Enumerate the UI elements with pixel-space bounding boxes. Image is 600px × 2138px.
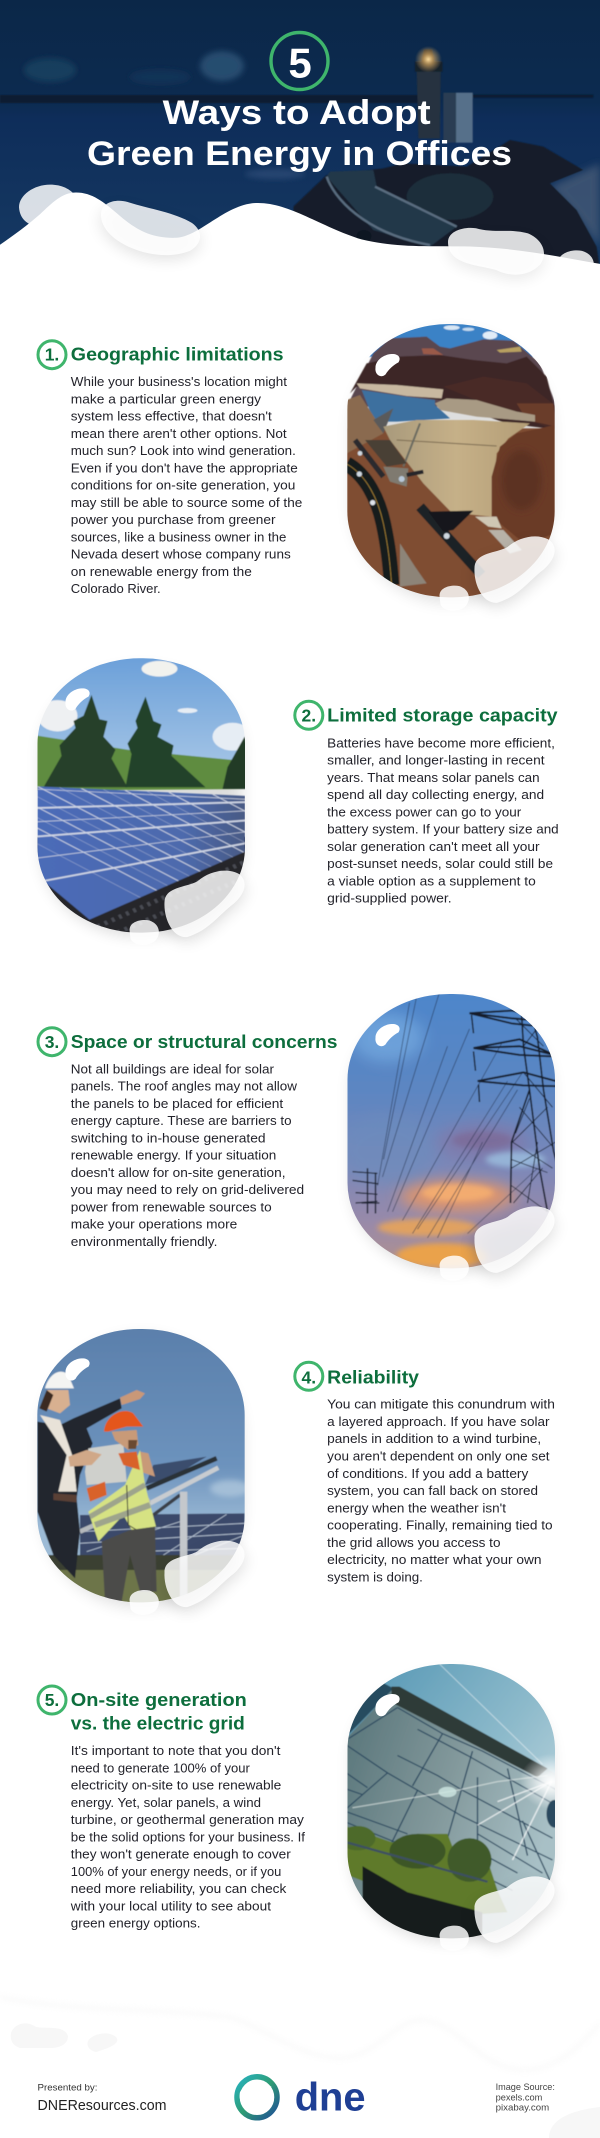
presented by	[38, 2083, 166, 2114]
panel: section 3 space or structural concerns	[38, 990, 562, 1281]
body text 1: Colorado River.	[71, 581, 161, 596]
badge 4	[295, 1362, 323, 1390]
white wave	[0, 192, 600, 296]
body text 5: green energy options.	[71, 1916, 200, 1931]
panel: section 4 reliability	[30, 1325, 555, 1615]
body text 3: doesn't allow for on-site generation,	[71, 1165, 286, 1180]
body text 2: smaller, and longer-lasting in recent	[327, 753, 545, 768]
photo 3: power pylons at sunset	[338, 990, 562, 1281]
blob cluster on wave	[19, 185, 594, 280]
body text 5: be the solid options for your business. If	[71, 1829, 305, 1844]
body text 1	[71, 374, 302, 596]
body text 1: much sun? Look into wind generation.	[71, 443, 296, 458]
body text 4: electricity, no matter what your own	[327, 1552, 542, 1567]
body text 3: make your operations more	[71, 1217, 237, 1232]
body text 4: system, you can fall back on stored	[327, 1483, 538, 1498]
header banner	[0, 0, 600, 296]
badge 3	[38, 1028, 66, 1056]
footer	[0, 1997, 600, 2138]
body text 3: Not all buildings are ideal for solar	[71, 1061, 275, 1076]
body text 4	[327, 1397, 555, 1584]
badge 2	[295, 701, 323, 729]
body text 3: power from renewable sources to	[71, 1200, 272, 1214]
body text 3: panels. The roof angles may not allow	[71, 1079, 298, 1094]
blobs on photo 1	[375, 354, 555, 611]
body text 5	[70, 1743, 305, 1931]
footer faint wave	[0, 1997, 600, 2138]
heading 5: vs. the electric grid	[71, 1712, 245, 1733]
body text 1: While your business's location might	[71, 374, 287, 389]
badge 4: 4.	[301, 1367, 316, 1387]
blobs bottom-right	[130, 871, 245, 945]
body text 2: grid-supplied power.	[327, 891, 452, 906]
body text 4: of conditions. If you add a battery	[327, 1466, 529, 1481]
header photo: lighthouse at night	[0, 0, 600, 283]
body text 3: the panels to be placed for efficient	[71, 1096, 284, 1111]
body text 5: electricity on-site to use renewable	[71, 1778, 281, 1792]
heading 4: Reliability	[327, 1366, 420, 1387]
body text 4: energy when the weather isn't	[327, 1500, 506, 1515]
image sources: Image Source:	[496, 2082, 555, 2092]
body text 4: You can mitigate this conundrum with	[327, 1397, 555, 1412]
dam picture	[347, 324, 555, 598]
body text 3: energy capture. These are barriers to	[71, 1113, 292, 1128]
body text 5: 100% of your energy needs, or if you	[71, 1864, 281, 1879]
number badge 5	[271, 32, 328, 90]
body text 4: system is doing.	[327, 1569, 423, 1584]
body text 4: panels in addition to a wind turbine,	[327, 1431, 541, 1446]
blob top-left	[375, 1694, 400, 1716]
body text 5: energy. Yet, solar panels, a wind	[71, 1795, 261, 1810]
body text 5: need more reliability, you can check	[71, 1881, 287, 1896]
blob top-left	[65, 688, 90, 711]
badge 3: 3.	[45, 1032, 59, 1052]
body text 1: may still be able to source some of the	[71, 495, 302, 510]
body text 5: turbine, or geothermal generation may	[71, 1812, 304, 1827]
heading 5	[71, 1689, 247, 1733]
blobs on photo 4	[65, 1358, 245, 1615]
body text 1: system less effective, that doesn't	[71, 408, 272, 424]
heading 2: Limited storage capacity	[327, 705, 558, 726]
dne logo	[237, 2076, 366, 2120]
body text 5: It's important to note that you don't	[71, 1743, 281, 1758]
body text 4: the grid allows you access to	[327, 1535, 500, 1550]
heading 3: Space or structural concerns	[71, 1031, 338, 1052]
photo 5: glass office building	[346, 1664, 558, 1950]
body text 1: on renewable energy from the	[71, 564, 252, 579]
panel: section 1 geographic limitations	[38, 320, 573, 611]
image sources: pexels.com	[496, 2092, 543, 2102]
body text 5: they won't generate enough to cover	[71, 1847, 292, 1862]
workers picture	[37, 1329, 245, 1602]
title: Green Energy in Offices	[87, 135, 512, 173]
body text 2: years. That means solar panels can	[327, 770, 540, 785]
number badge 5: 5	[288, 39, 312, 86]
body text 2: a viable option as a supplement to	[327, 874, 536, 888]
panel: section 2 limited storage capacity	[0, 654, 559, 945]
body text 3: switching to in-house generated	[71, 1130, 266, 1145]
dne logo: dne	[295, 2076, 366, 2120]
body text 1: sources, like a business owner in the	[71, 529, 286, 544]
body text 2: solar generation can't meet all your	[327, 839, 540, 854]
body text 2: Batteries have become more efficient,	[327, 735, 555, 750]
badge 1	[38, 341, 66, 369]
body text 1: mean there aren't other options. Not	[71, 426, 287, 441]
body text 3: environmentally friendly.	[71, 1234, 217, 1249]
title: Ways to Adopt	[163, 94, 431, 132]
body text 2: spend all day collecting energy, and	[327, 787, 544, 802]
body text 3	[71, 1061, 304, 1249]
body text 1: make a particular green energy	[71, 391, 262, 406]
image sources: pixabay.com	[496, 2103, 550, 2113]
body text 4: you aren't dependent on only one set	[327, 1448, 550, 1464]
presented by: DNEResources.com	[38, 2098, 166, 2114]
blobs bottom-right	[440, 1206, 555, 1281]
body text 5: need to generate 100% of your	[71, 1760, 251, 1775]
heading 5: On-site generation	[71, 1689, 247, 1710]
heading 1: Geographic limitations	[71, 344, 284, 365]
badge 5: 5.	[45, 1690, 59, 1710]
body text 2: the excess power can go to your	[327, 804, 522, 819]
body text 5: with your local utility to see about	[70, 1898, 271, 1913]
title	[87, 94, 512, 173]
presented by: Presented by:	[38, 2083, 98, 2094]
body text 2	[327, 735, 559, 906]
blob top-left	[375, 1024, 400, 1046]
white wave and blobs	[0, 185, 600, 296]
badge 5	[38, 1686, 66, 1714]
body text 3: you may need to rely on grid-delivered	[71, 1182, 304, 1197]
badge 2: 2.	[301, 706, 316, 726]
photo 1: hoover dam	[346, 324, 558, 610]
body text 3: renewable energy. If your situation	[71, 1148, 276, 1163]
photo 4: two workers with solar panels	[36, 1329, 248, 1614]
photo 2: solar panels and trees	[36, 658, 248, 944]
blobs bottom-right	[440, 1876, 555, 1951]
badge 1: 1.	[45, 345, 59, 365]
body text 1: conditions for on-site generation, you	[71, 478, 295, 493]
image sources	[496, 2082, 555, 2113]
body text 4: cooperating. Finally, remaining tied to	[327, 1518, 553, 1533]
body text 1: power you purchase from greener	[71, 512, 276, 527]
body text 1: Nevada desert whose company runs	[71, 547, 291, 562]
body text 2: post-sunset needs, solar could still be	[327, 856, 553, 871]
body text 2: battery system. If your battery size and	[327, 822, 559, 837]
panel: section 5 on-site generation vs the electric grid	[38, 1660, 584, 1951]
body text 4: a layered approach. If you have solar	[327, 1414, 550, 1429]
body text 1: Even if you don't have the appropriate	[71, 460, 298, 475]
